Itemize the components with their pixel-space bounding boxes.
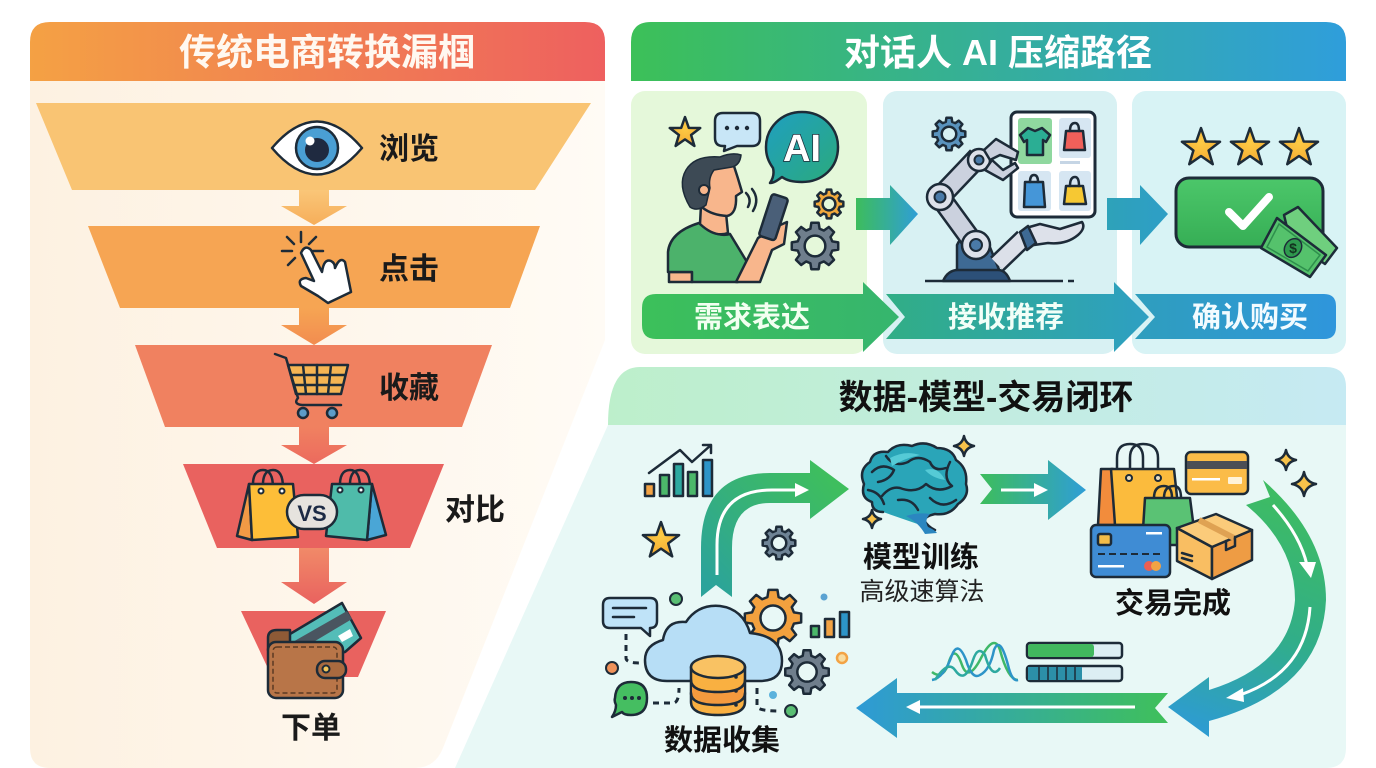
icon: shopping and payment: [1091, 444, 1252, 579]
header bar: loop: [608, 367, 1346, 425]
heading: loop title: 数据-模型-交易闭环: [839, 379, 1133, 417]
icon: chat bubble: [715, 113, 760, 151]
step band: confirm purchase: [1135, 294, 1336, 339]
icon: orange gear: [745, 590, 801, 646]
step band: need expression: [642, 282, 899, 352]
icon: sparkle: [954, 436, 974, 456]
arrow: recommend to confirm: [1107, 185, 1168, 245]
header bar: funnel: [30, 22, 605, 81]
icon: AI bubble: [766, 112, 838, 183]
icon: eye: [272, 122, 362, 174]
funnel tier: browse: [36, 103, 591, 190]
panel: conversational AI path: [631, 22, 1346, 354]
arrow: browse to click: [281, 190, 347, 225]
icon: progress bars: [1027, 643, 1122, 681]
arrow: data to model: [701, 460, 849, 597]
icon: database: [691, 656, 745, 715]
icon: blue gear: [933, 118, 965, 150]
arrow: transaction to results: [1168, 480, 1326, 737]
icon: sparkle: [863, 510, 881, 528]
icon: money: [1261, 207, 1337, 277]
label: confirm purchase: 确认购买: [1192, 301, 1308, 334]
arrow: click to favorite: [281, 308, 347, 345]
icon: wave signal: [932, 643, 1018, 680]
panel background: [30, 81, 605, 768]
icon: green chat: [612, 682, 647, 717]
arrow: model to transaction: [980, 460, 1086, 520]
header bar: AI path: [631, 22, 1346, 81]
icon: star: [643, 522, 679, 556]
heading: AI path title: 对话人 AI 压缩路径: [844, 32, 1152, 73]
icon: sparkle: [1292, 472, 1316, 496]
icon: mini bars: [811, 612, 849, 637]
icon: confirm button: [1176, 178, 1323, 247]
icon: product screen: [1011, 112, 1095, 217]
icon: shopping cart: [275, 354, 348, 418]
label: model training: 模型训练: [863, 541, 979, 574]
arrow: need to recommend: [856, 185, 918, 245]
panel background: [455, 425, 1346, 768]
arrow: results back to data: [856, 678, 1168, 738]
funnel tier: order: [241, 603, 386, 698]
label: order: 下单: [281, 712, 341, 745]
label: browse: 浏览: [379, 133, 439, 166]
icon: three stars: [1182, 128, 1318, 164]
funnel tier: click: [88, 226, 540, 308]
card: need expression: [631, 91, 867, 354]
icon: brain: [862, 443, 967, 534]
icon: grey gear: [785, 650, 829, 694]
label: favorite: 收藏: [379, 372, 439, 405]
icon: sparkle: [1276, 450, 1296, 470]
dashed connectors: [626, 634, 780, 711]
icon: pointer hand: [282, 232, 351, 303]
arrow: favorite to compare: [281, 427, 347, 464]
icon: grey gear: [792, 223, 838, 269]
label: data collection: 数据收集: [664, 724, 780, 757]
icon: data cloud cluster: [603, 590, 849, 717]
label: advanced algorithm: 高级速算法: [859, 578, 985, 606]
panel: traditional funnel: [30, 22, 605, 768]
icon: small gear: [763, 527, 795, 559]
icon: cloud: [645, 606, 782, 681]
decorative dots: [606, 593, 847, 717]
step band: receive recommendation: [886, 282, 1149, 352]
label: click: 点击: [379, 253, 439, 286]
heading: funnel title: 传统电商转换漏椢: [179, 32, 475, 73]
label: compare: 对比: [445, 494, 505, 527]
icon: person with phone: [668, 154, 788, 282]
panel: data model transaction loop: [455, 367, 1346, 768]
icon: wallet with card: [268, 603, 361, 698]
icon: money: $: [1289, 240, 1297, 256]
icon: orange gear: [815, 190, 843, 218]
funnel tier: favorite: [135, 345, 492, 427]
icon: bags versus: [237, 470, 386, 540]
label: need expression: 需求表达: [694, 301, 810, 334]
card: confirm purchase: [1132, 91, 1346, 354]
icon: growth bars: [645, 445, 712, 496]
label: receive recommendation: 接收推荐: [948, 301, 1064, 334]
icon: bags versus: VS: [297, 501, 327, 526]
icon: robot arm: [925, 139, 1083, 281]
icon: message box: [603, 598, 657, 636]
card: receive recommendation: [883, 91, 1117, 354]
funnel tier: compare: [183, 464, 444, 548]
arrow: compare to order: [281, 548, 347, 604]
label: transaction complete: 交易完成: [1115, 587, 1231, 620]
icon: AI bubble: AI: [783, 128, 821, 170]
icon: star: [670, 117, 700, 146]
